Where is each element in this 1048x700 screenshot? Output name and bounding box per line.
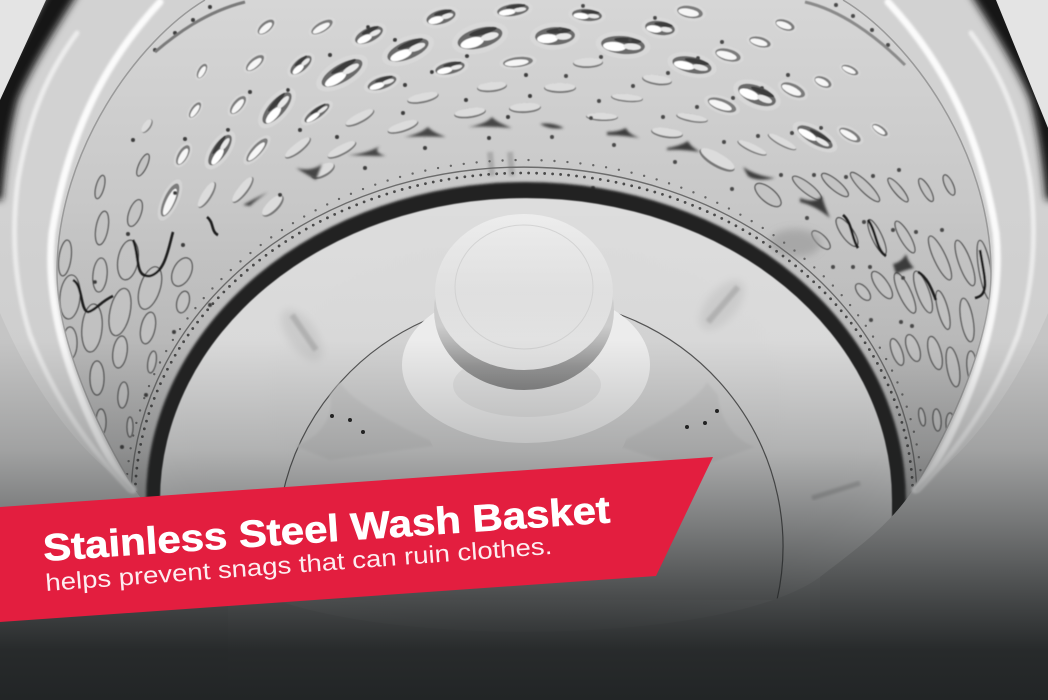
drum dimples: right half xyxy=(490,1,996,433)
drum edge lines xyxy=(57,0,991,490)
banner subtext: helps prevent snags that can ruin clothes. xyxy=(44,533,553,597)
agitator base xyxy=(277,298,783,600)
dark corner shadows xyxy=(0,0,1048,200)
floor fins xyxy=(273,272,860,498)
light corners xyxy=(0,0,1048,128)
rim highlight bands xyxy=(14,2,1034,490)
lower tub surfaces xyxy=(0,313,1048,700)
dotted rim rows xyxy=(126,160,922,500)
banner heading: Stainless Steel Wash Basket xyxy=(42,489,612,570)
basket floor disc xyxy=(160,198,892,640)
red banner xyxy=(0,457,713,622)
dark basket ring xyxy=(146,182,906,640)
agitator column xyxy=(402,214,650,484)
drum dimples: left half xyxy=(57,0,541,447)
dark gradient overlay xyxy=(0,200,1048,700)
